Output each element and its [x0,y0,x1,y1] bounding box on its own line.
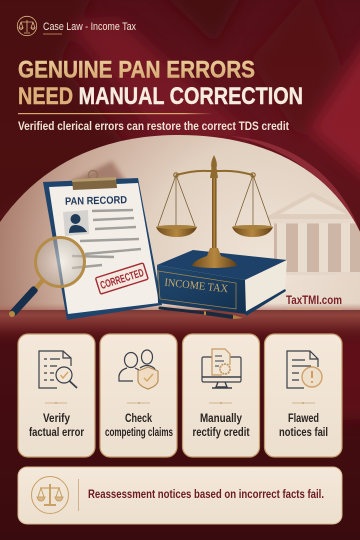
card label: Check [125,411,152,425]
icon: scales in circle [32,476,68,514]
title: NEED MANUAL CORRECTION [18,83,303,110]
document lines [72,210,141,268]
card label: factual error [29,425,84,439]
card label: Flawed [288,411,319,425]
corrected stamp: CORRECTED [99,267,145,292]
card: check competing claims [100,334,177,457]
id photo [63,210,89,236]
site label: TaxTMI.com [286,295,342,307]
card label [192,411,250,439]
card label [29,411,84,439]
table edge [0,304,360,338]
clipboard [43,170,162,320]
icon: monitor with document and gear [202,349,241,388]
card label: rectify credit [192,425,250,439]
title: GENUINE PAN ERRORS [18,56,255,84]
card label: competing claims [105,425,173,439]
card label: notices fail [279,425,328,439]
pen [160,308,243,319]
card label [279,411,328,439]
book [157,250,287,316]
magnifying glass [9,238,84,317]
icon: document with warning [287,351,322,388]
card label: Verify [43,411,70,425]
document heading: PAN RECORD [65,194,128,208]
balance scale [156,155,273,268]
corrected stamp [95,263,148,294]
book title: INCOME TAX [164,277,229,295]
clipboard clip [72,170,117,190]
courthouse [268,192,360,275]
icon: scales badge [17,16,37,36]
header label: Case Law - Income Tax [43,21,136,33]
header badge [17,16,136,36]
card: flawed notices fail [264,334,342,457]
subtitle: Verified clerical errors can restore the correct TDS credit [18,121,289,133]
card label: Manually [200,411,242,425]
card: manually rectify credit [182,334,260,457]
banner: conclusion [18,467,342,524]
title [18,56,303,110]
clipboard shadow [70,161,128,190]
icon: people with shield [119,350,158,389]
card: verify factual error [18,334,95,457]
panel: illustration scene [0,135,360,345]
icon: document with magnifier [39,351,77,388]
card label [105,411,173,439]
